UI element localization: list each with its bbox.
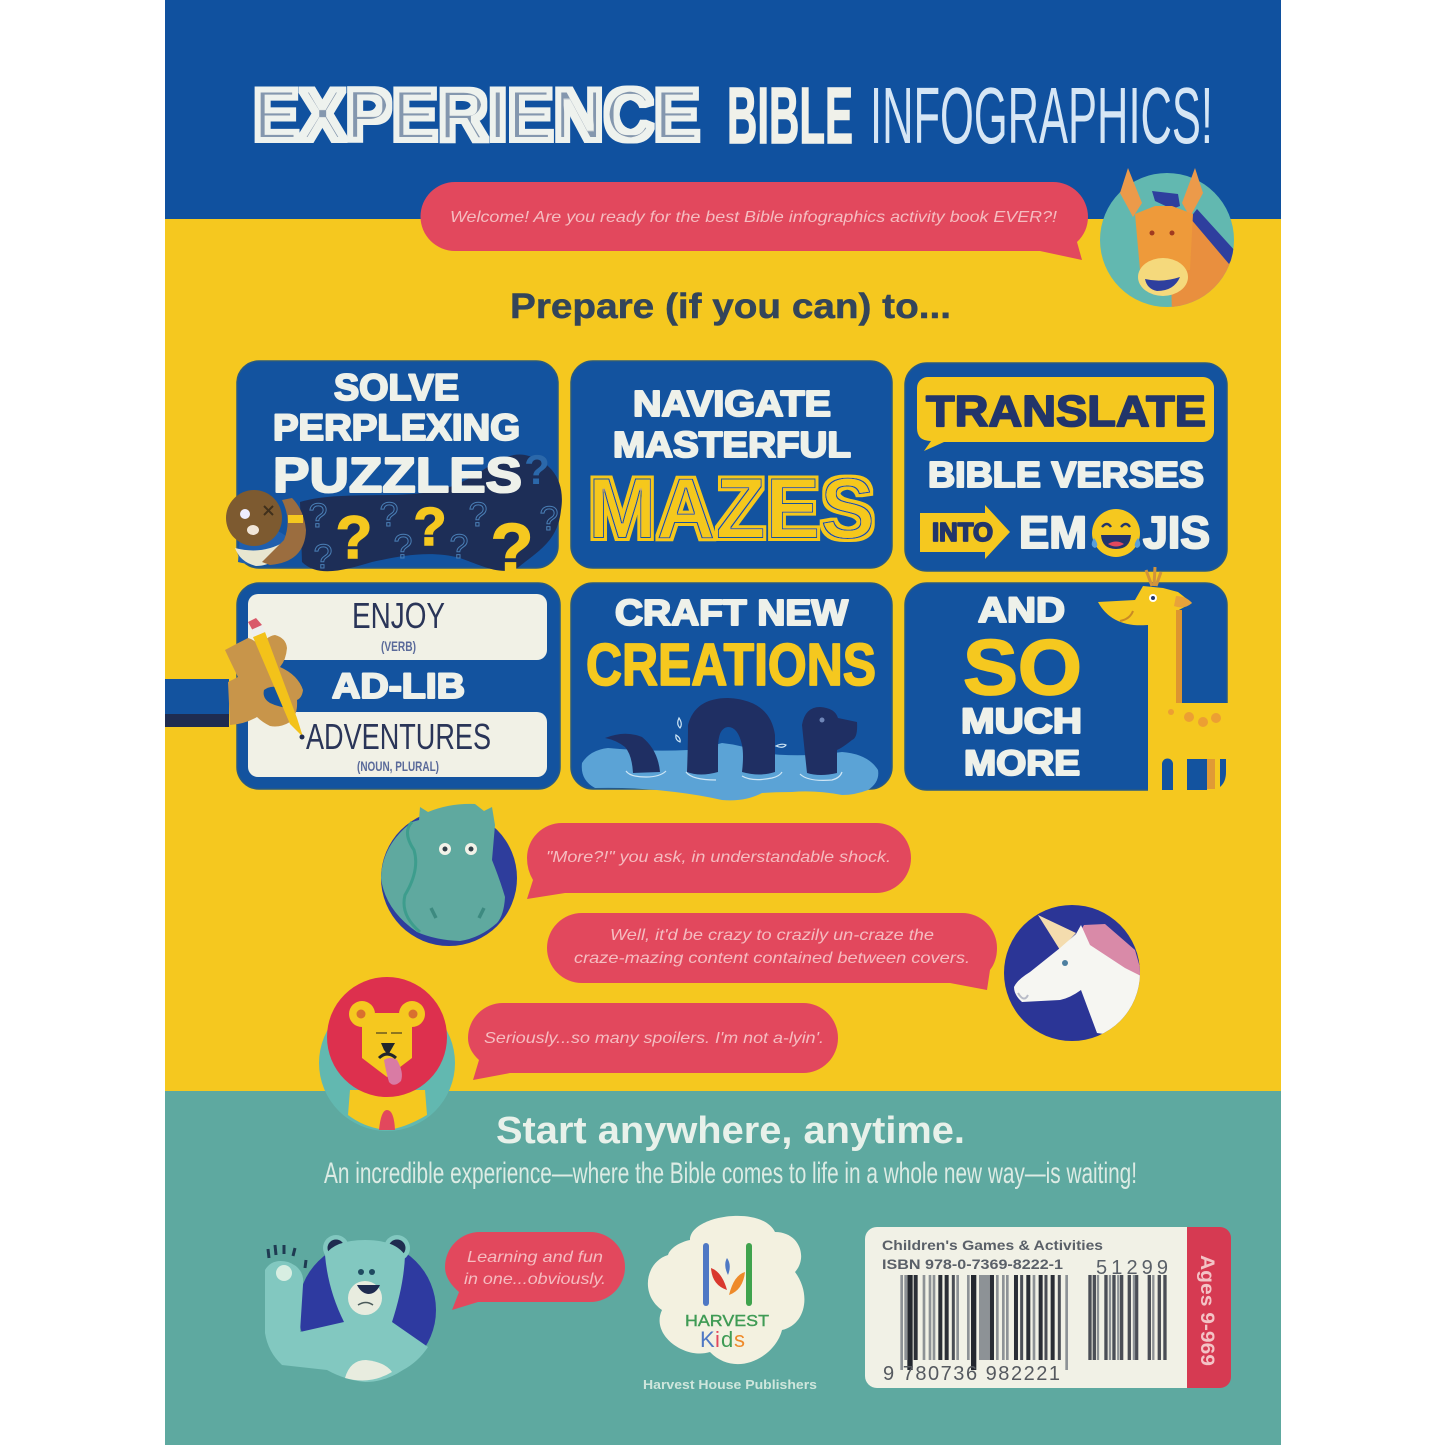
dark thought cloud with question marks: ? <box>380 496 398 534</box>
title <box>253 71 1213 160</box>
icon: lake monster <box>605 698 857 775</box>
speech bubble: spoilers: Seriously...so many spoilers. I'm not a-lyin'. <box>484 1030 824 1047</box>
dark thought cloud with question marks: ? <box>469 496 487 534</box>
dark thought cloud with question marks <box>300 446 562 587</box>
heading: prepare: Prepare (if you can) to... <box>510 287 951 326</box>
text: category and ISBN <box>882 1237 1103 1272</box>
speech bubble: spoilers <box>468 1003 838 1080</box>
blank: enjoy: ENJOY <box>352 595 445 636</box>
blank: enjoy: (VERB) <box>381 638 416 654</box>
speech bubble: more <box>527 823 911 899</box>
heading: solve perplexing: SOLVE <box>334 367 459 408</box>
dark thought cloud with question marks: ? <box>394 528 412 566</box>
water splashes <box>626 718 842 780</box>
heading: emojis: JIS <box>1143 507 1210 558</box>
logo wordmark: kids: i <box>715 1327 720 1352</box>
logo: harvest kids <box>648 1216 804 1364</box>
panel: navigate mazes <box>571 361 892 568</box>
speech bubble: more: "More?!" you ask, in understandable shock. <box>546 849 891 866</box>
speech bubble: crazy: craze-mazing content contained between covers. <box>574 950 970 967</box>
heading: creations: CREATIONS <box>586 632 876 698</box>
icon: hand with pencil <box>165 618 304 740</box>
logo wordmark: kids: d <box>721 1327 733 1352</box>
dark thought cloud with question marks: ? <box>450 528 468 566</box>
logo wordmark: kids: K <box>700 1327 715 1352</box>
text: category and ISBN: ISBN 978-0-7369-8222-1 <box>882 1256 1063 1272</box>
barcode label: 51299 <box>1096 1257 1168 1279</box>
title: EXPERIENCE <box>253 75 700 156</box>
panel: and so much more: AND <box>978 591 1065 630</box>
blank: adventures: ADVENTURES <box>306 716 491 757</box>
speech bubble: translate <box>917 377 1214 451</box>
speech bubble: learning: Learning and fun <box>467 1249 603 1266</box>
barcode label <box>865 1227 1231 1388</box>
dark thought cloud with question marks: ? <box>540 500 558 538</box>
heading: emojis <box>1019 507 1210 558</box>
character: lion <box>319 977 455 1131</box>
character: unicorn <box>1004 905 1145 1041</box>
arrow: into: INTO <box>932 517 993 547</box>
character: hippo <box>381 804 517 946</box>
blank: adventures <box>248 712 547 777</box>
panel: translate: BIBLE VERSES <box>928 454 1204 495</box>
logo wordmark: kids <box>700 1327 745 1352</box>
speech bubble: crazy: Well, it'd be crazy to crazily un-craze the <box>610 927 934 944</box>
dark thought cloud with question marks: ? <box>491 509 533 587</box>
icon: baby <box>226 490 306 566</box>
logo wordmark: kids: s <box>734 1327 745 1352</box>
icon: donkey <box>1100 168 1234 307</box>
icon: giraffe <box>1098 567 1228 795</box>
heading: so: SO <box>963 623 1082 711</box>
character: bear <box>265 1235 436 1382</box>
dark thought cloud with question marks: ? <box>314 538 332 576</box>
icon: laughing emoji <box>1092 509 1140 557</box>
title: BIBLE <box>727 71 853 160</box>
panel: and so much more: MUCH <box>961 702 1082 741</box>
heading: emojis: EM <box>1019 507 1087 558</box>
dark thought cloud with question marks: ? <box>309 497 327 535</box>
heading: solve perplexing: PERPLEXING <box>273 407 520 448</box>
speech bubble: learning <box>445 1232 625 1310</box>
publisher name: Harvest House Publishers <box>643 1377 817 1392</box>
panel: and so much more: MORE <box>964 744 1080 783</box>
dark thought cloud with question marks: ? <box>414 497 446 557</box>
speech bubble: welcome <box>420 182 1088 260</box>
heading: solve perplexing <box>273 367 520 448</box>
panel: translate <box>905 363 1227 571</box>
book cover background <box>165 0 1281 1445</box>
speech bubble: welcome: Welcome! Are you ready for the best Bible infographics activity book EVER?! <box>450 209 1058 226</box>
speech bubble: crazy <box>547 913 997 990</box>
text: category and ISBN: Children's Games & Activities <box>882 1237 1103 1253</box>
panel: ad-lib adventures: AD-LIB <box>332 667 465 706</box>
blank: enjoy <box>248 594 547 660</box>
speech bubble: learning: in one...obviously. <box>464 1271 606 1288</box>
barcode label: 9 780736 982221 <box>883 1363 1060 1385</box>
panel: ad-lib adventures <box>237 583 560 789</box>
heading: start anywhere: Start anywhere, anytime. <box>496 1110 965 1152</box>
panel: solve puzzles <box>226 361 562 587</box>
logo mark <box>703 1243 752 1306</box>
speech bubble: translate: TRANSLATE <box>926 387 1206 436</box>
panel: navigate mazes: NAVIGATE <box>633 383 831 424</box>
water <box>582 743 878 800</box>
age label: Ages 9-969 <box>1196 1255 1217 1366</box>
heading: mazes: MAZES <box>588 461 875 557</box>
panel: navigate mazes: MASTERFUL <box>613 424 851 465</box>
arrow: into <box>920 505 1010 559</box>
heading: puzzles: PUZZLES <box>273 449 522 503</box>
barcode <box>902 1275 1165 1370</box>
panel: and so much more <box>905 567 1228 795</box>
blank: adventures: (NOUN, PLURAL) <box>357 758 439 774</box>
panel: craft creations: CRAFT NEW <box>615 592 848 633</box>
panel: craft creations <box>571 583 892 800</box>
logo: harvest kids: HARVEST <box>685 1313 769 1330</box>
dark thought cloud with question marks: ? <box>336 504 372 571</box>
dark thought cloud with question marks: ? <box>524 446 550 493</box>
